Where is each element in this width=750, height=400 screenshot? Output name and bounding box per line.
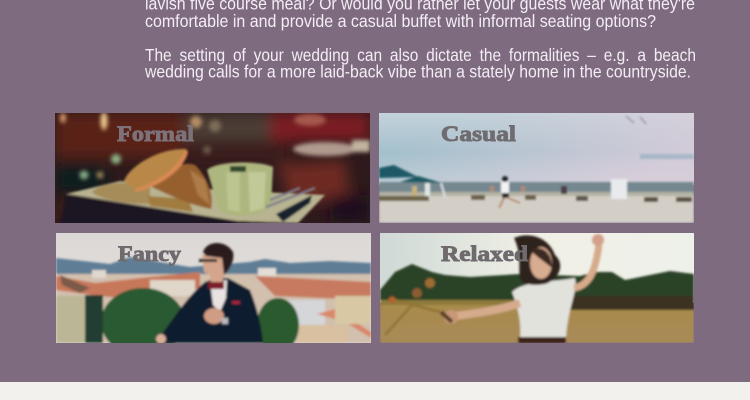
trees [101, 286, 183, 343]
photo panel: casual [379, 113, 694, 223]
paragraph: guest formality [145, 0, 695, 31]
footer band [0, 382, 750, 400]
bread [92, 183, 150, 204]
glass jar [207, 162, 273, 216]
paragraph: wedding setting [144, 45, 696, 82]
canopies [379, 165, 418, 178]
cutlery [276, 195, 312, 222]
paragraph: wedding setting: wedding calls for a more laid-back vibe than a stately home in the countryside. [144, 62, 691, 82]
white box [611, 179, 627, 199]
beach loungers [471, 195, 485, 200]
heading: Casual: Casual [441, 121, 516, 146]
treeline [380, 264, 694, 300]
heading: Formal: Formal [117, 121, 194, 146]
body text [144, 0, 696, 82]
paragraph: wedding setting: The setting of your wedding can also dictate the formalities – e.g. a beach [145, 45, 696, 65]
photo panel: formal [55, 112, 370, 225]
runner [502, 176, 508, 182]
plate [66, 181, 325, 223]
photo panel: fancy [56, 233, 371, 343]
man in suit [155, 243, 263, 344]
photo panel: relaxed [380, 233, 694, 343]
woman [444, 234, 604, 343]
paragraph: guest formality: comfortable in and provide a casual buffet with informal seating options? [145, 11, 656, 31]
heading: Relaxed: Relaxed [441, 241, 528, 266]
heading: Fancy: Fancy [118, 241, 181, 266]
